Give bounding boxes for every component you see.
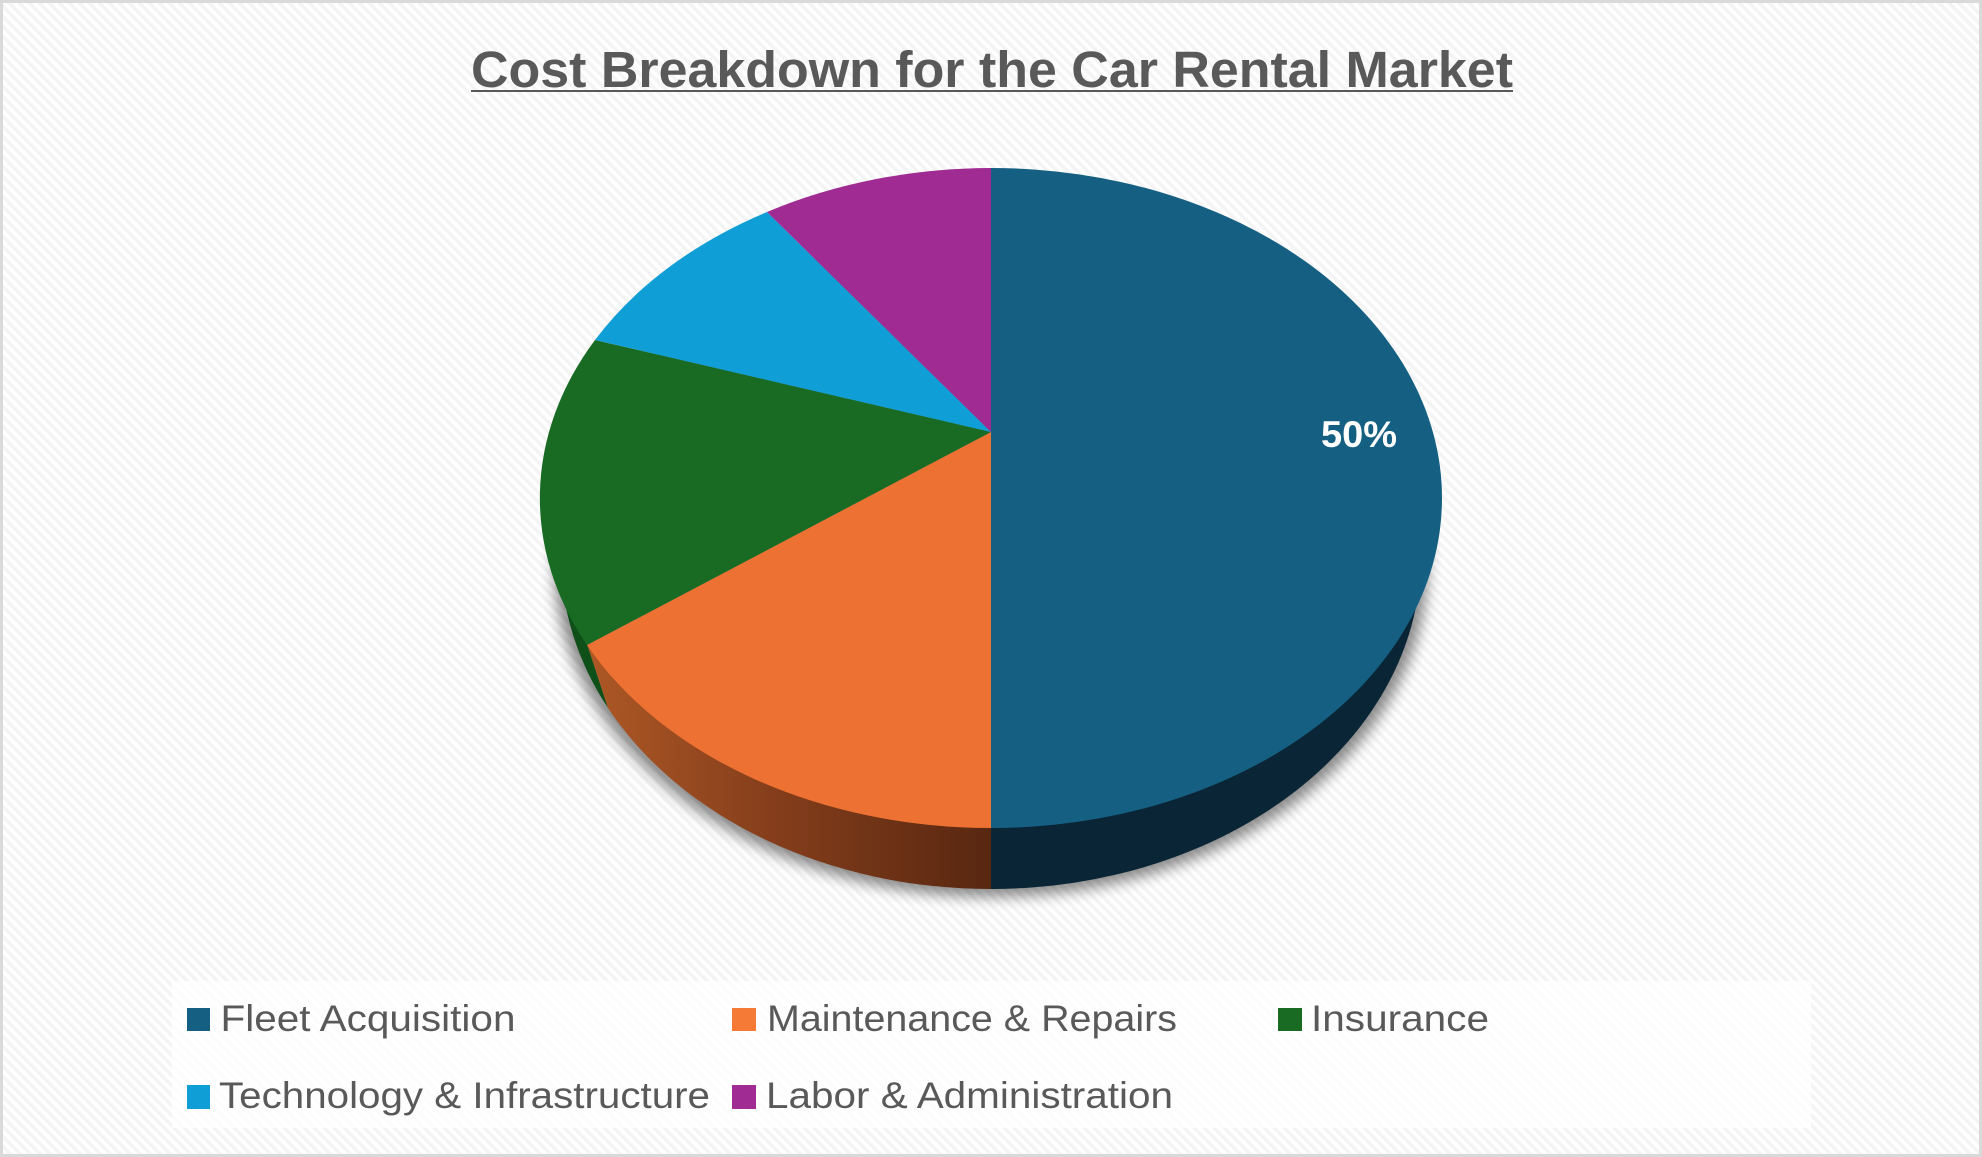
legend item: insurance: Insurance [1311, 998, 1489, 1039]
data label 50%: 50% [1321, 413, 1397, 455]
side: insurance [561, 556, 608, 708]
pie drop shadow [554, 231, 1428, 897]
slice: labor and administration [767, 168, 991, 432]
slice: fleet acquisition 50% [991, 168, 1442, 828]
slice: insurance [540, 340, 991, 645]
slice: technology and infrastructure [595, 212, 991, 432]
side: fleet acquisition [991, 223, 1421, 889]
legend item: maintenance and repairs: Maintenance & Repairs [767, 998, 1177, 1039]
side: maintenance and repairs [587, 644, 991, 889]
legend item: labor and administration: Labor & Administration [766, 1075, 1173, 1116]
legend panel [172, 981, 1811, 1128]
legend item: technology and infrastructure: Technology & Infrastructure [219, 1075, 710, 1116]
legend [172, 981, 1811, 1128]
legend item: fleet acquisition: Fleet Acquisition [220, 998, 516, 1039]
title: Cost Breakdown for the Car Rental Market [471, 41, 1513, 98]
slice: maintenance and repairs [587, 432, 991, 828]
3D pie chart [540, 168, 1442, 897]
